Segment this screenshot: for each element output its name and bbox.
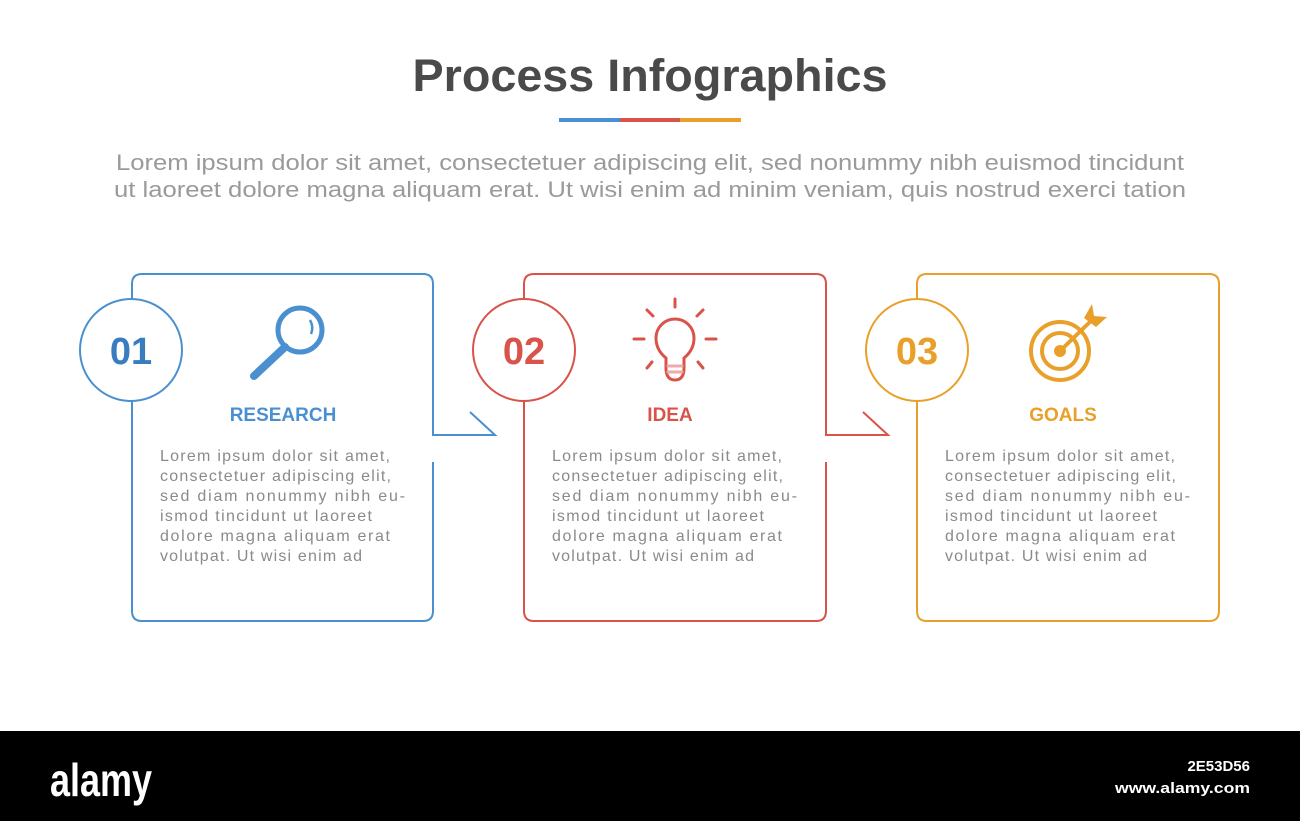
body text: sed diam nonummy nibh eu- — [945, 488, 1190, 505]
icon: light bulb — [634, 299, 716, 380]
number circle: 03 — [896, 331, 938, 373]
heading: RESEARCH — [230, 405, 336, 426]
body text — [160, 448, 405, 565]
heading: IDEA — [647, 405, 693, 426]
panel: idea — [473, 274, 888, 621]
body text: volutpat. Ut wisi enim ad — [945, 548, 1147, 565]
body text: dolore magna aliquam erat — [552, 528, 783, 545]
body text: dolore magna aliquam erat — [160, 528, 391, 545]
footer url: www.alamy.com — [1114, 780, 1250, 797]
body text — [945, 448, 1190, 565]
panel: goals — [866, 274, 1219, 621]
body text: Lorem ipsum dolor sit amet, — [945, 448, 1175, 465]
body text: ismod tincidunt ut laoreet — [160, 508, 373, 525]
body text: volutpat. Ut wisi enim ad — [160, 548, 362, 565]
box outline — [917, 274, 1219, 621]
subtitle — [114, 150, 1186, 202]
icon: target — [1031, 304, 1107, 380]
number circle — [473, 299, 575, 401]
subtitle: ut laoreet dolore magna aliquam erat. Ut wisi enim ad minim veniam, quis nostrud exerci tation — [114, 177, 1186, 202]
footer id: 2E53D56 — [1187, 758, 1250, 775]
footer bar — [0, 731, 1300, 821]
body text: ismod tincidunt ut laoreet — [945, 508, 1158, 525]
body text: sed diam nonummy nibh eu- — [160, 488, 405, 505]
body text: Lorem ipsum dolor sit amet, — [160, 448, 390, 465]
body text: ismod tincidunt ut laoreet — [552, 508, 765, 525]
body text — [552, 448, 797, 565]
number circle — [80, 299, 182, 401]
body text: volutpat. Ut wisi enim ad — [552, 548, 754, 565]
body text: consectetuer adipiscing elit, — [945, 468, 1176, 485]
body text: sed diam nonummy nibh eu- — [552, 488, 797, 505]
number circle — [866, 299, 968, 401]
box outline — [524, 274, 888, 621]
icon: magnifier — [254, 308, 322, 376]
number circle: 01 — [110, 331, 152, 373]
number circle: 02 — [503, 331, 545, 373]
footer logo: alamy — [50, 754, 152, 806]
body text: consectetuer adipiscing elit, — [160, 468, 391, 485]
heading: GOALS — [1029, 405, 1097, 426]
body text: Lorem ipsum dolor sit amet, — [552, 448, 782, 465]
subtitle: Lorem ipsum dolor sit amet, consectetuer adipiscing elit, sed nonummy nibh euismod tincidunt — [116, 150, 1184, 175]
panel: research — [80, 274, 495, 621]
title: Process Infographics — [412, 50, 888, 101]
body text: consectetuer adipiscing elit, — [552, 468, 783, 485]
box outline — [132, 274, 495, 621]
title underline — [559, 118, 741, 122]
body text: dolore magna aliquam erat — [945, 528, 1176, 545]
